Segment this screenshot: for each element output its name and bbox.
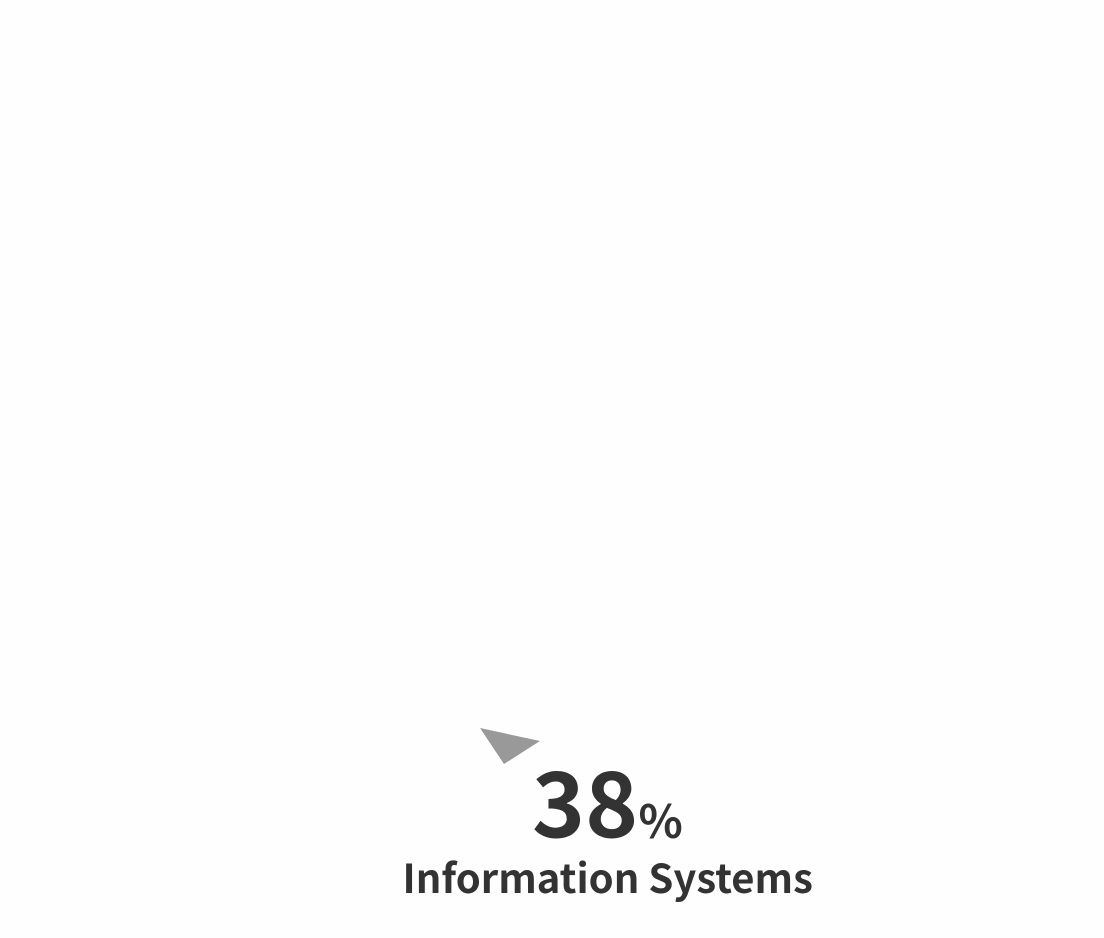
label: Information Systems: Information Systems bbox=[402, 847, 813, 905]
stat percent sign: % bbox=[638, 786, 683, 852]
stat number: 38 bbox=[532, 733, 638, 863]
stat: 38 percent bbox=[532, 733, 683, 863]
icon: grey pointer triangle bbox=[480, 728, 540, 764]
